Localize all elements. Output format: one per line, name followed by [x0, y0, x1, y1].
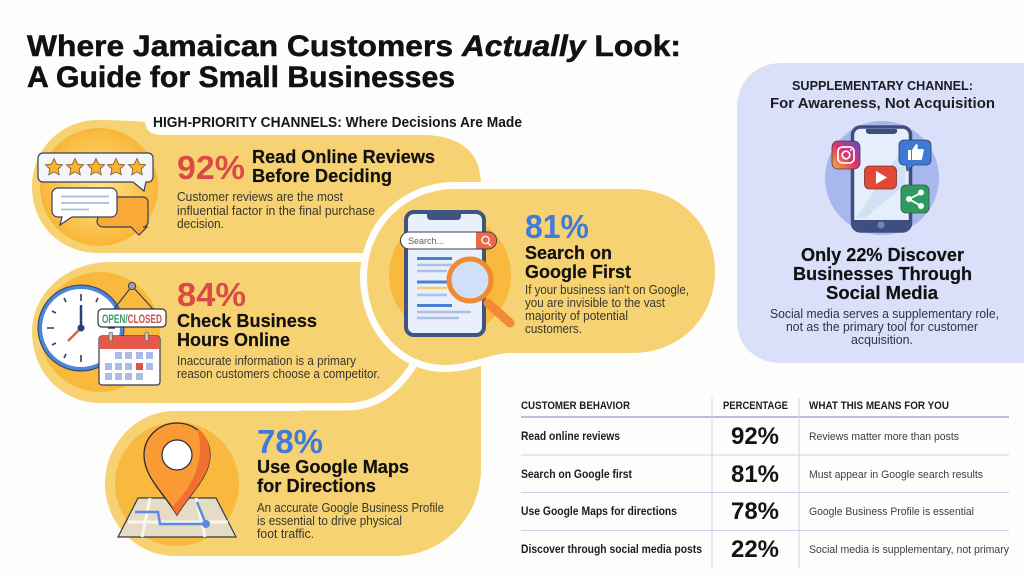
table: customer behavior — [521, 398, 1009, 568]
stat: 92%: 92% — [177, 149, 245, 186]
text: reviews description — [177, 190, 375, 231]
text: search description: If your business ian't on Google, — [525, 283, 689, 297]
stat: 78%: 78% — [257, 423, 323, 460]
heading: supplementary channel: SUPPLEMENTARY CHANNEL: — [792, 78, 973, 93]
text: maps description: is essential to drive physical — [257, 514, 402, 528]
row: read online reviews: Reviews matter more than posts — [809, 431, 959, 443]
panel: search on Google first — [367, 189, 715, 365]
text: hours description: Inaccurate information is a primary — [177, 354, 357, 368]
row: use Google Maps for directions: Google Business Profile is essential — [809, 506, 974, 518]
row: search on Google first: 81% — [731, 461, 779, 488]
row: read online reviews: Read online reviews — [521, 431, 620, 443]
heading: check business hours: Hours Online — [177, 329, 290, 350]
heading: check business hours — [177, 310, 317, 350]
text: reviews description: influential factor in the final purchase — [177, 204, 375, 218]
heading: supplementary channel — [770, 78, 995, 112]
icon: clock, sign and calendar — [38, 272, 166, 392]
text: hours description: reason customers choose a competitor. — [177, 367, 380, 381]
row: discover through social media posts: Discover through social media posts — [521, 544, 702, 556]
heading: use Google Maps — [257, 456, 409, 496]
heading: only 22%: Businesses Through — [793, 263, 972, 284]
heading: read online reviews — [252, 146, 435, 186]
text: reviews description: decision. — [177, 217, 224, 231]
heading: search on Google first: Google First — [525, 261, 631, 282]
icon: phone with social apps — [825, 121, 939, 235]
text: maps description — [257, 501, 444, 541]
text: social description: acquisition. — [851, 333, 913, 347]
row: discover through social media posts: 22% — [731, 536, 779, 563]
icon: clock, sign and calendar: OPEN/CLOSED — [102, 312, 162, 326]
heading: use Google Maps: Use Google Maps — [257, 456, 409, 477]
stat: 84%: 84% — [177, 276, 246, 313]
row: search on Google first — [521, 461, 983, 488]
row: use Google Maps for directions: 78% — [731, 498, 779, 525]
title — [27, 30, 681, 94]
row: search on Google first: Must appear in Google search results — [809, 469, 983, 481]
icon: phone with search and magnifier — [389, 212, 511, 336]
panel: check business hours — [32, 262, 412, 403]
row: read online reviews — [521, 423, 959, 450]
text: search description: majority of potential — [525, 309, 628, 323]
text: social description: not as the primary tool for customer — [786, 320, 978, 334]
row: search on Google first: Search on Google first — [521, 469, 632, 481]
heading: read online reviews: Before Deciding — [252, 165, 392, 186]
icon: review speech bubbles — [38, 128, 158, 246]
heading: only 22% — [793, 244, 972, 303]
table header: PERCENTAGE — [723, 400, 788, 412]
table header: CUSTOMER BEHAVIOR — [521, 400, 630, 412]
text: search description: customers. — [525, 322, 582, 336]
text: maps description: An accurate Google Business Profile — [257, 501, 444, 515]
text: reviews description: Customer reviews are the most — [177, 190, 343, 204]
stat: 81%: 81% — [525, 208, 589, 245]
heading: use Google Maps: for Directions — [257, 475, 376, 496]
heading: only 22%: Social Media — [826, 282, 939, 303]
icon: map pin on map — [115, 422, 239, 546]
text: hours description — [177, 354, 380, 381]
row: read online reviews: 92% — [731, 423, 779, 450]
heading: read online reviews: Read Online Reviews — [252, 146, 435, 167]
row: use Google Maps for directions: Use Google Maps for directions — [521, 506, 677, 518]
text: social description — [770, 307, 999, 347]
heading: search on Google first — [525, 242, 631, 282]
panel: use Google Maps for directions — [105, 340, 481, 556]
text: social description: Social media serves a supplementary role, — [770, 307, 999, 321]
title: A Guide for Small Businesses — [27, 61, 455, 94]
heading: search on Google first: Search on — [525, 242, 612, 263]
text: search description: you are invisible to the vast — [525, 296, 665, 310]
row: discover through social media posts — [521, 536, 1009, 563]
heading: high-priority channels: HIGH-PRIORITY CHANNELS: Where Decisions Are Made — [153, 115, 522, 131]
row: use Google Maps for directions — [521, 498, 974, 525]
table header — [521, 400, 949, 412]
panel: supplementary channel — [737, 63, 1024, 363]
panel: read online reviews — [32, 120, 481, 253]
row: discover through social media posts: Social media is supplementary, not primary — [809, 544, 1009, 556]
heading: check business hours: Check Business — [177, 310, 317, 331]
title: Where Jamaican Customers Actually Look: — [27, 30, 681, 63]
text: maps description: foot traffic. — [257, 527, 314, 541]
heading: only 22%: Only 22% Discover — [801, 244, 964, 265]
table header: WHAT THIS MEANS FOR YOU — [809, 400, 949, 412]
text: search description — [525, 283, 689, 336]
icon: phone with search and magnifier: Search... — [408, 236, 444, 247]
heading: supplementary channel: For Awareness, Not Acquisition — [770, 95, 995, 112]
